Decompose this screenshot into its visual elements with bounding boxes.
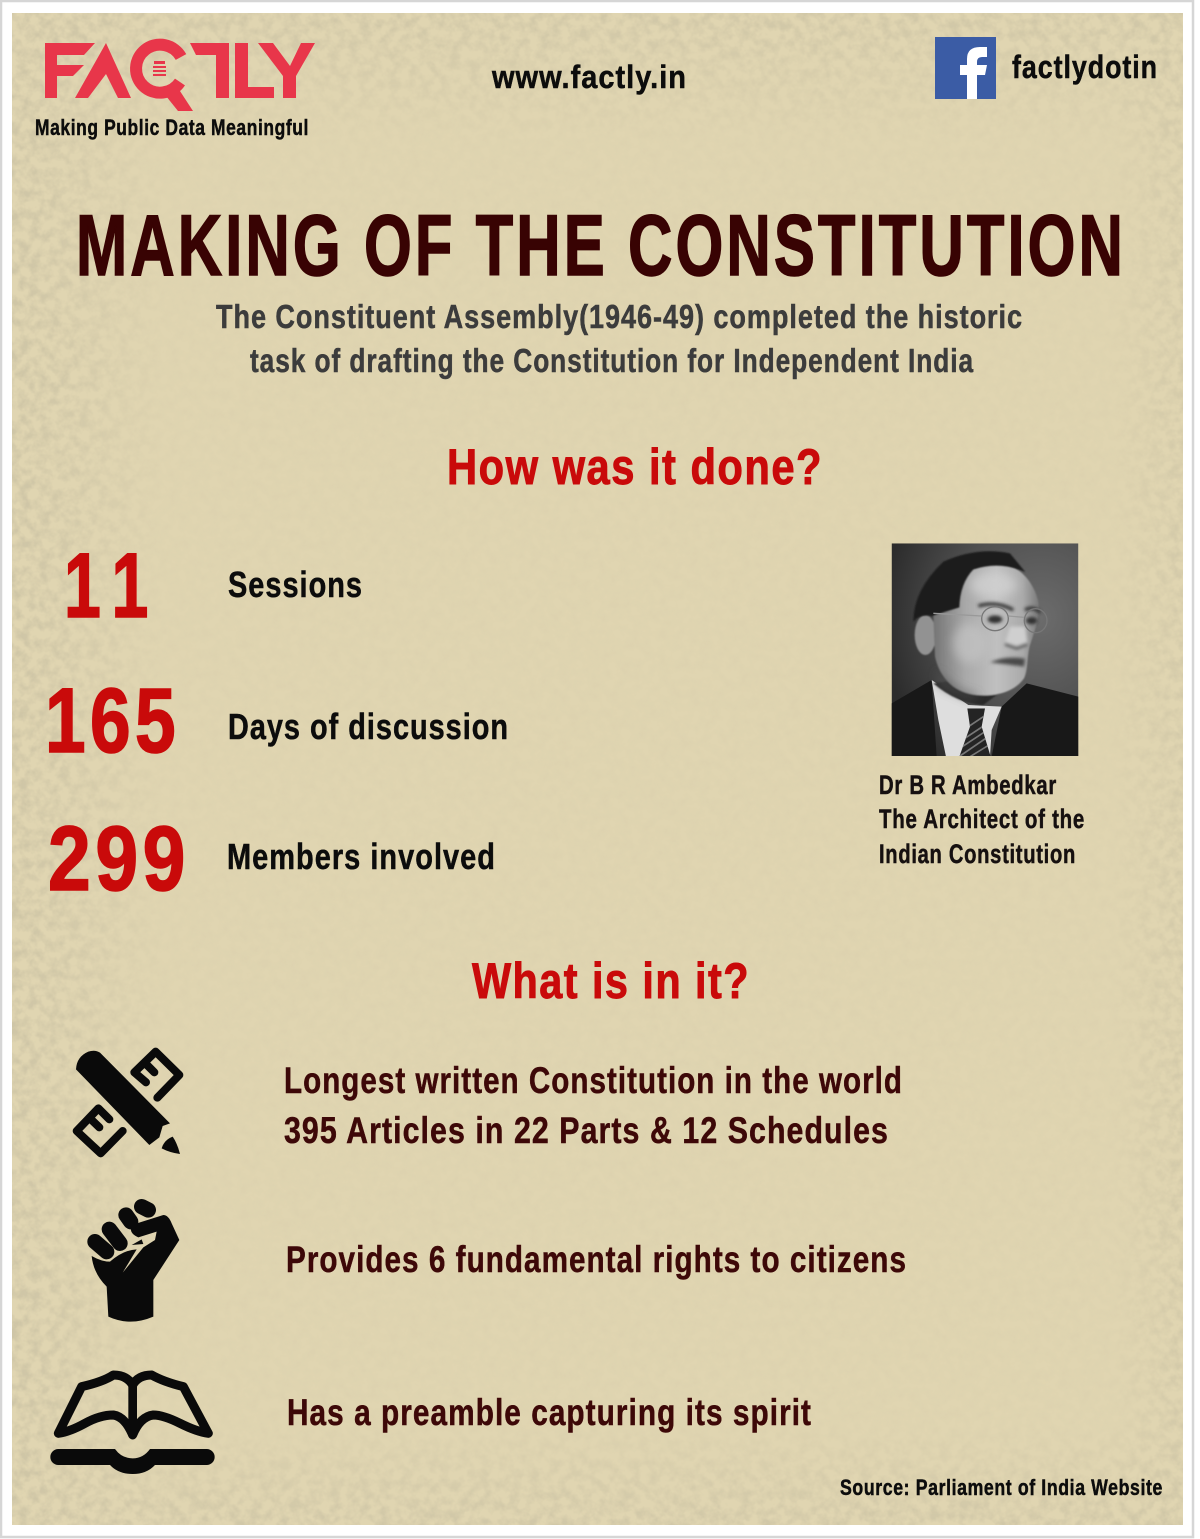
icon: pencil and ruler <box>76 1051 180 1154</box>
portrait caption: The Architect of the <box>879 804 1085 834</box>
subtitle: The Constituent Assembly(1946-49) completed the historic <box>216 298 1023 335</box>
text: fundamental rights: Provides 6 fundamental rights to citizens <box>286 1239 907 1280</box>
heading: what is in it: What is in it? <box>472 953 750 1009</box>
text: longest constitution: Longest written Constitution in the world <box>284 1060 903 1101</box>
icon: raised fist <box>92 1207 179 1322</box>
portrait caption: Dr B R Ambedkar <box>879 770 1057 800</box>
stat: members involved: Members involved <box>227 836 496 877</box>
icon: facebook <box>935 37 996 99</box>
stat: members involved <box>48 808 496 910</box>
subtitle: task of drafting the Constitution for Independent India <box>250 342 974 379</box>
stat: sessions <box>64 533 363 637</box>
logo: Factly <box>45 43 315 111</box>
portrait caption: Indian Constitution <box>879 839 1076 869</box>
stat: sessions: 11 <box>64 533 148 637</box>
text: preamble: Has a preamble capturing its spirit <box>287 1392 812 1433</box>
stat: members involved: 299 <box>48 808 190 910</box>
heading: how was it done: How was it done? <box>447 439 823 495</box>
logo tagline: Making Public Data Meaningful <box>35 115 309 140</box>
text: longest constitution <box>284 1060 903 1151</box>
portrait caption <box>879 770 1085 869</box>
website url: www.factly.in <box>491 59 687 95</box>
text: longest constitution: 395 Articles in 22 Parts & 12 Schedules <box>284 1110 889 1151</box>
stat: days of discussion: Days of discussion <box>228 706 509 747</box>
stat: days of discussion <box>45 670 509 772</box>
icon: open book <box>50 1375 215 1474</box>
subtitle <box>216 298 1023 379</box>
stat: sessions: Sessions <box>228 564 363 605</box>
facebook handle: factlydotin <box>1012 49 1158 85</box>
stat: days of discussion: 165 <box>45 670 180 772</box>
portrait: Dr B R Ambedkar <box>892 543 1078 757</box>
